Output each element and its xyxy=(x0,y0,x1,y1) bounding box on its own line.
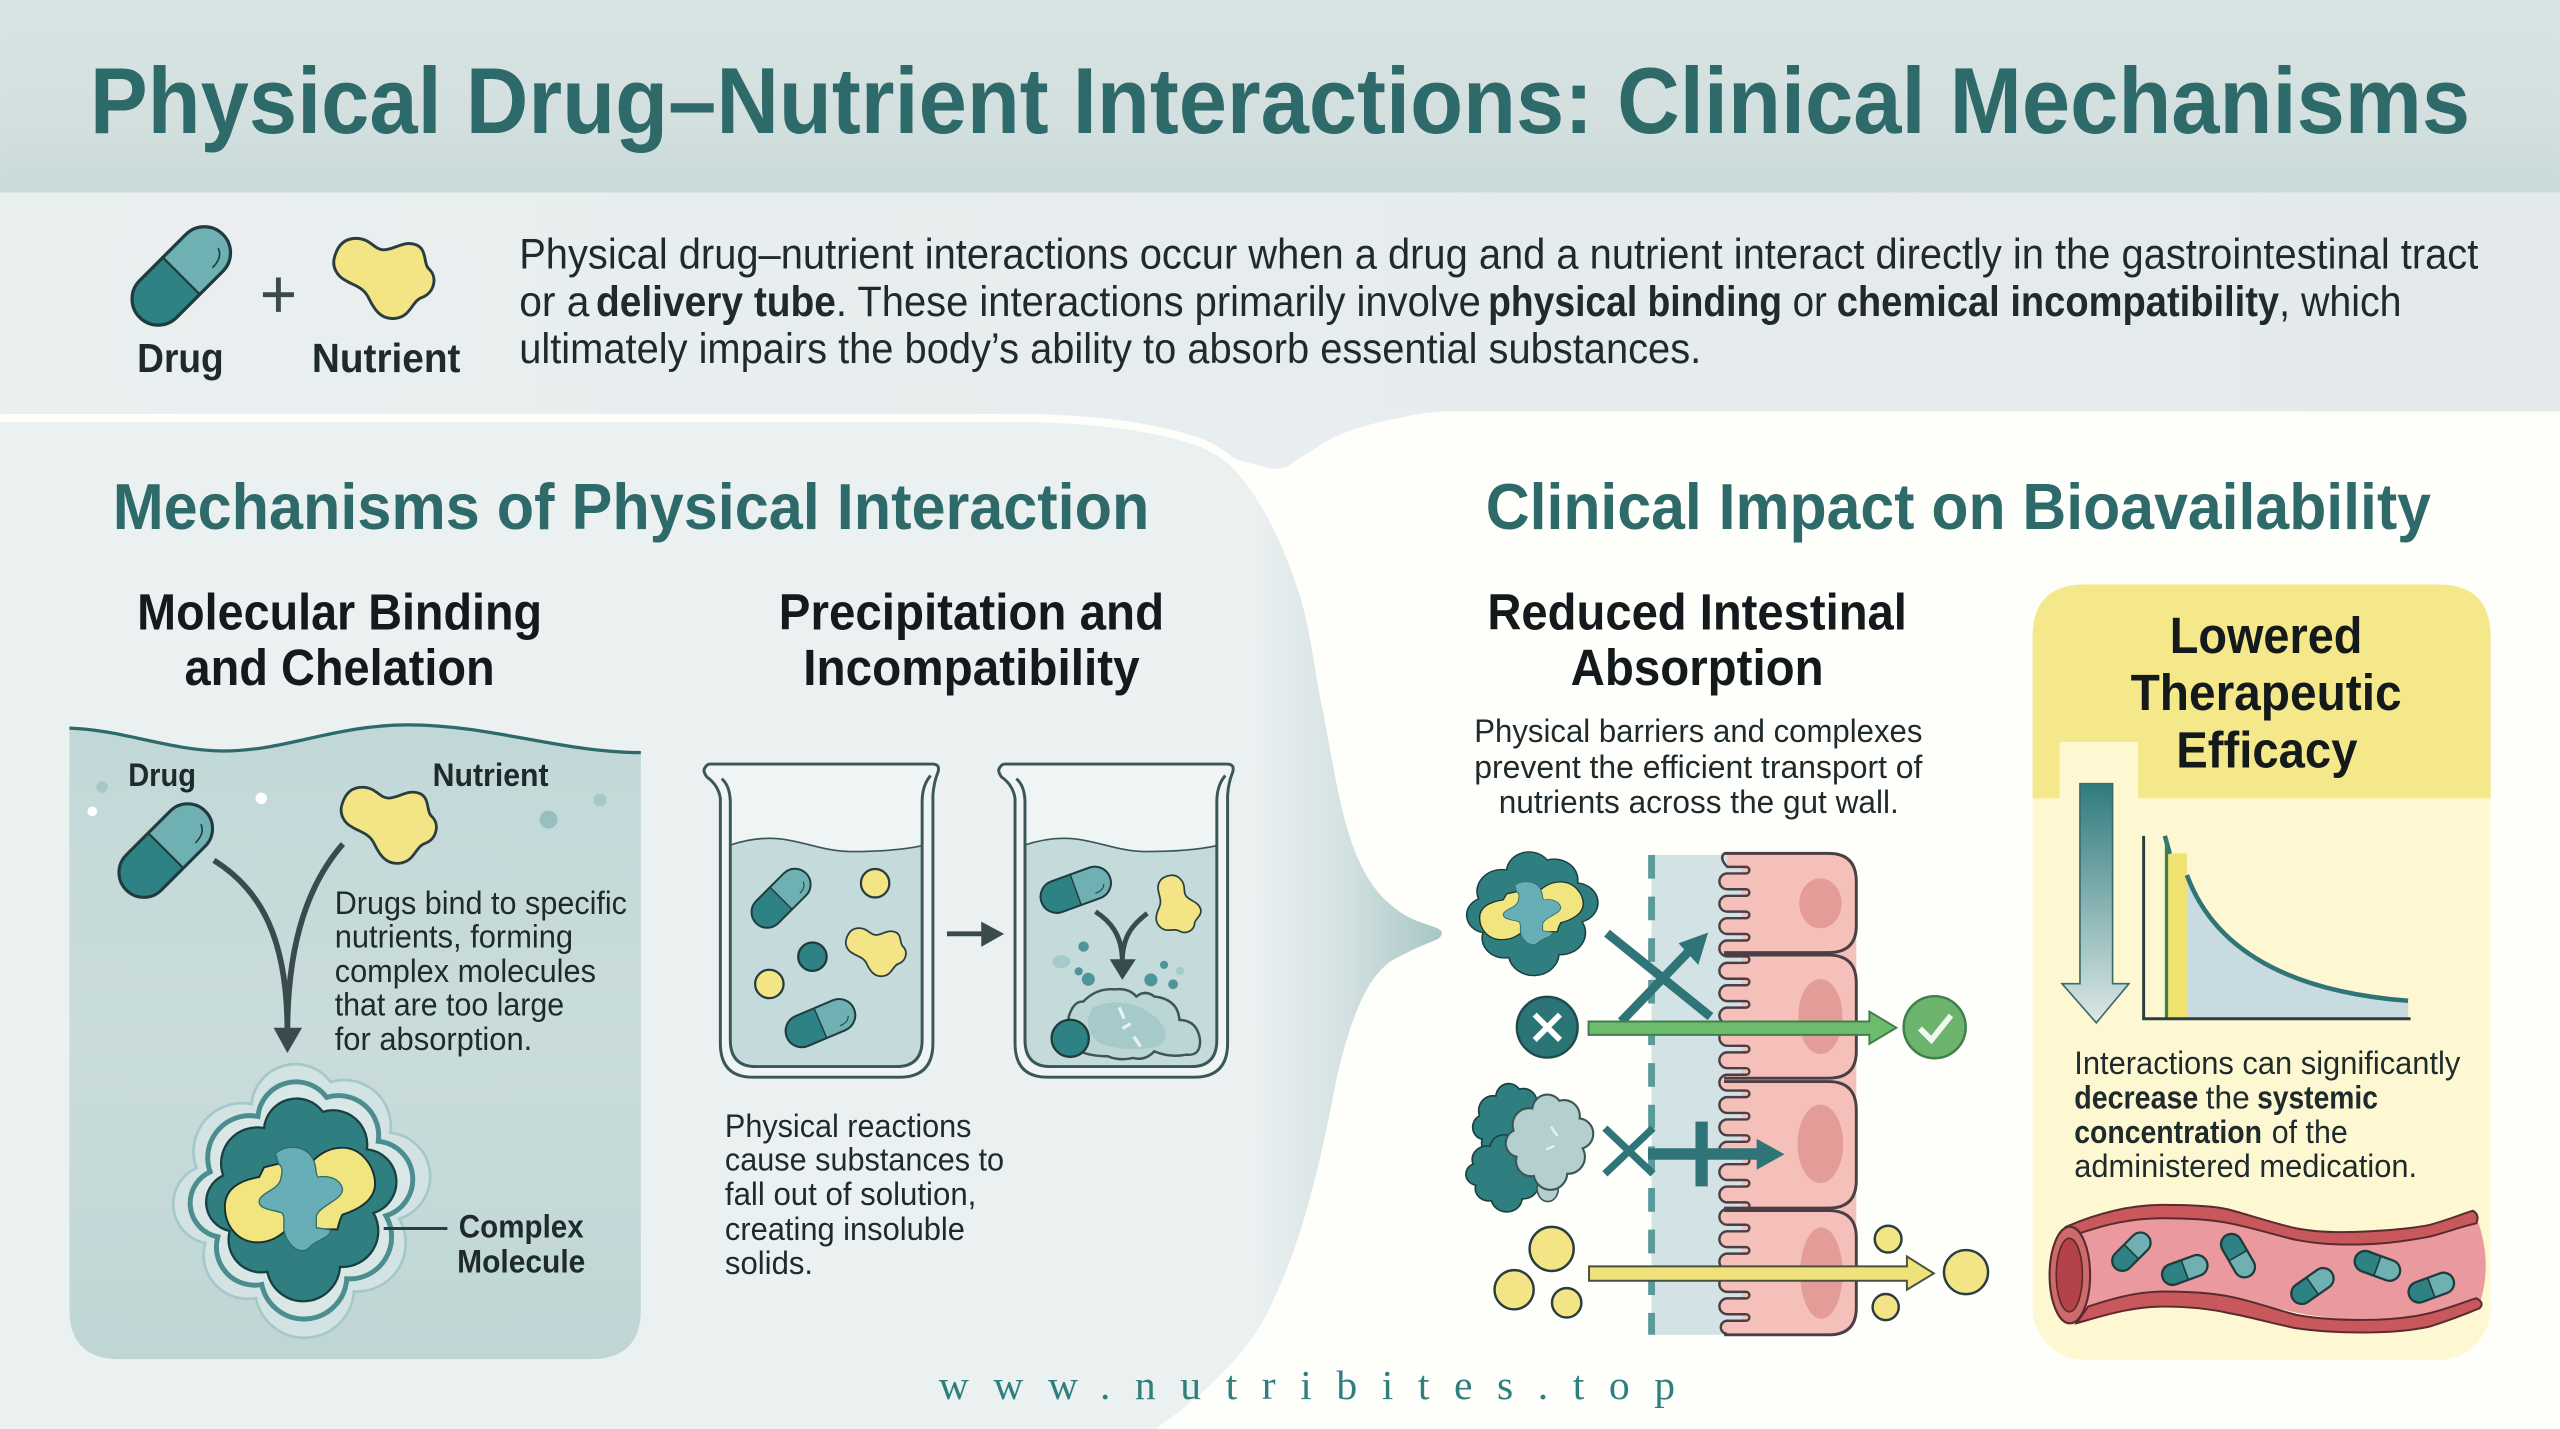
membrane band xyxy=(1652,855,1746,1335)
particles xyxy=(1052,941,1184,989)
vessel opening xyxy=(2050,1227,2090,1323)
text: precipitation description: fall out of solution, xyxy=(725,1175,976,1212)
arrow: green absorbed xyxy=(1589,1012,1896,1044)
subheading: molecular binding xyxy=(137,583,542,696)
capsule and nutrient xyxy=(1036,862,1210,944)
gut wall diagram xyxy=(1466,852,1988,1335)
text: precipitation description: solids. xyxy=(725,1244,813,1281)
intro text block: . These interactions primarily involve xyxy=(836,278,1481,325)
header yellow xyxy=(2033,584,2491,798)
beaker: before xyxy=(704,764,939,1077)
villi fill xyxy=(1719,854,1750,1334)
heading: Therapeutic xyxy=(2131,664,2402,721)
label: complex molecule: Complex xyxy=(459,1207,584,1244)
icon: nutrient blob xyxy=(334,238,434,319)
subheading: molecular binding: and Chelation xyxy=(185,639,495,696)
band extension above the notch xyxy=(0,411,1469,490)
text: efficacy description: decrease xyxy=(2074,1079,2198,1116)
intro text block: Physical drug–nutrient interactions occur when a drug and a nutrient interact directly in the gastrointestinal tract xyxy=(519,231,2479,278)
arrow: settling xyxy=(1096,912,1147,980)
bubbles xyxy=(87,781,607,829)
intro text block: , which xyxy=(2279,278,2402,325)
text: absorption description: Physical barriers and complexes xyxy=(1474,712,1922,749)
panel background xyxy=(2033,584,2491,1360)
text: efficacy description: administered medication. xyxy=(2074,1147,2417,1184)
intro text block: delivery tube xyxy=(596,278,836,325)
glass outer xyxy=(999,764,1233,1077)
arrow: decrease xyxy=(2062,784,2129,1023)
intro text block: or xyxy=(1793,278,1827,325)
chart: concentration curve xyxy=(2144,836,2411,1019)
label: drug: Drug xyxy=(128,756,196,793)
heading: Efficacy xyxy=(2176,721,2358,778)
contents: capsules and nutrients xyxy=(745,862,906,1052)
panel: therapeutic efficacy xyxy=(2033,584,2491,1360)
arrow: binding converge xyxy=(214,844,343,1053)
heading xyxy=(2131,607,2402,778)
panel: right clinical impact background xyxy=(1143,411,2560,1429)
glass inner xyxy=(1016,775,1225,1067)
subheading: reduced absorption: Reduced Intestinal xyxy=(1487,583,1907,640)
panel: molecular binding xyxy=(69,725,641,1359)
free nutrient dots xyxy=(1495,1226,1988,1320)
arrow: beaker transition xyxy=(947,922,1004,947)
intestinal cells fill xyxy=(1742,853,1856,1335)
complex molecule xyxy=(173,1064,430,1338)
complex molecule, upper xyxy=(1467,852,1598,976)
icon: blocked circle xyxy=(1517,997,1578,1058)
panel background with wavy top xyxy=(69,725,641,1359)
text: binding description: nutrients, forming xyxy=(335,918,573,955)
text: efficacy description: the xyxy=(2206,1079,2250,1116)
header band xyxy=(0,0,2560,193)
label: complex molecule: Molecule xyxy=(457,1243,585,1280)
text: binding description: that are too large xyxy=(335,985,564,1022)
label: nutrient: Nutrient xyxy=(312,335,461,381)
heading: clinical impact: Clinical Impact on Bioavailability xyxy=(1486,471,2431,543)
glass inner xyxy=(722,775,931,1067)
icon: drug capsule xyxy=(121,216,241,336)
vessel upper wall xyxy=(2067,1205,2478,1244)
subheading: molecular binding: Molecular Binding xyxy=(137,583,542,640)
plus sign xyxy=(263,278,294,312)
water xyxy=(1025,838,1217,1067)
text: binding description: for absorption. xyxy=(335,1020,532,1057)
text: precipitation description: cause substances to xyxy=(725,1141,1004,1178)
text: absorption description xyxy=(1474,712,1923,820)
intro text block: ultimately impairs the body’s ability to absorb essential substances. xyxy=(519,325,1701,372)
intro text block xyxy=(519,231,2479,372)
heading: Lowered xyxy=(2170,607,2362,664)
footer website: www.nutribites.top xyxy=(939,1363,1675,1409)
text: efficacy description: of the xyxy=(2272,1113,2348,1150)
text: absorption description: nutrients across the gut wall. xyxy=(1499,783,1899,820)
precipitate cluster xyxy=(1466,1084,1593,1212)
precipitate xyxy=(1052,989,1200,1059)
text: efficacy description: Interactions can significantly xyxy=(2074,1044,2461,1081)
heading: mechanisms: Mechanisms of Physical Interaction xyxy=(113,471,1149,543)
vessel interior xyxy=(2070,1211,2486,1321)
blocked small cross xyxy=(1605,1128,1653,1174)
icon: drug capsule xyxy=(109,794,223,908)
text: binding description xyxy=(335,884,627,1057)
text: efficacy description: systemic xyxy=(2257,1079,2378,1116)
beaker: after xyxy=(999,764,1233,1077)
label: complex molecule xyxy=(457,1207,585,1280)
vessel lower wall xyxy=(2077,1292,2482,1333)
text: precipitation description: creating insoluble xyxy=(725,1210,965,1247)
subheading: reduced absorption: Absorption xyxy=(1571,639,1824,696)
subheading: precipitation: Precipitation and xyxy=(779,583,1164,640)
text: precipitation description: Physical reactions xyxy=(725,1107,971,1144)
text: binding description: Drugs bind to specific xyxy=(335,884,627,921)
intro text block: or a xyxy=(519,278,590,325)
icon: nutrient blob xyxy=(341,787,436,863)
capsules in bloodstream xyxy=(2108,1228,2457,1308)
panel: left mechanisms background xyxy=(0,418,1446,1429)
blocked crossing arrows xyxy=(1607,933,1711,1022)
text: efficacy description: concentration xyxy=(2074,1113,2262,1150)
intro band xyxy=(0,193,2560,411)
subheading: reduced absorption xyxy=(1487,583,1907,696)
subheading: precipitation xyxy=(779,583,1164,696)
intro text block: chemical incompatibility xyxy=(1837,278,2279,325)
text: absorption description: prevent the efficient transport of xyxy=(1474,748,1923,785)
water xyxy=(730,838,922,1067)
subheading: precipitation: Incompatibility xyxy=(803,639,1140,696)
arrow: blocked transport xyxy=(1648,1122,1784,1186)
label: nutrient: Nutrient xyxy=(433,756,549,793)
dashed barrier xyxy=(1649,855,1654,1335)
leader line xyxy=(384,1228,447,1230)
text: efficacy description xyxy=(2074,1044,2461,1184)
nuclei xyxy=(1798,878,1843,1319)
icon: check circle xyxy=(1904,996,1966,1058)
villi outline xyxy=(1719,853,1749,1334)
intestinal cell outlines xyxy=(1724,853,1856,1335)
wave line xyxy=(69,725,641,753)
arrow: yellow nutrient path xyxy=(1589,1256,1934,1290)
text: binding description: complex molecules xyxy=(335,952,596,989)
label: drug: Drug xyxy=(137,335,224,381)
text: precipitation description xyxy=(725,1107,1004,1281)
intro text block: physical binding xyxy=(1488,278,1782,325)
blood vessel xyxy=(2050,1205,2486,1333)
glass outer xyxy=(704,764,939,1077)
